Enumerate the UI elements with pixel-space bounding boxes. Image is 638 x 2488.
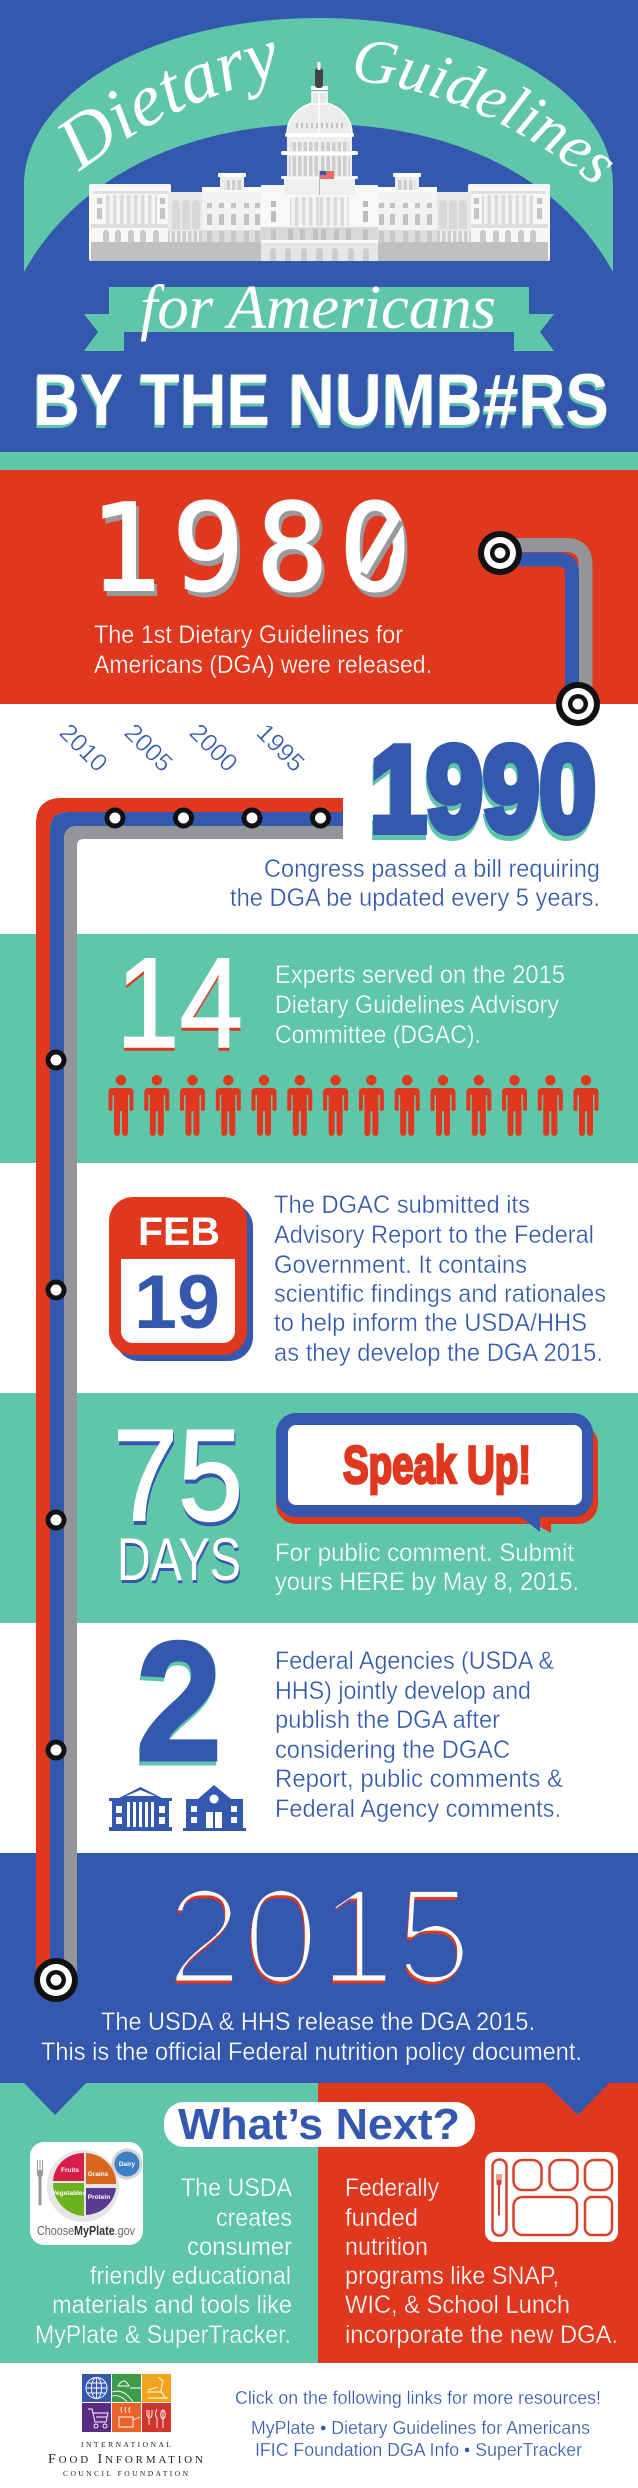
- text: Feb 19 description: The DGAC submitted its: [274, 1191, 530, 1219]
- panel: what's next right: [318, 2083, 638, 2363]
- text: federal agencies description: [275, 1647, 563, 1823]
- year: 1990: 1990: [370, 721, 596, 857]
- title script: Dietary Guidelines: Guidelines: [356, 42, 613, 182]
- text: USDA creates materials: The USDA: [181, 2174, 292, 2202]
- icon: MyPlate card: Fruits: [61, 2167, 79, 2174]
- text: federal agencies description: HHS) jointly develop and: [275, 1677, 531, 1705]
- panel: Feb 19: [0, 1163, 638, 1393]
- stations on timeline: [48, 810, 328, 1758]
- text: 2015 description: The USDA & HHS release the DGA 2015.: [101, 2008, 535, 2036]
- text: 14 experts description: [275, 961, 565, 1049]
- year: 1980: 1980: [89, 480, 411, 619]
- icon: MyPlate card: Dairy: [119, 2161, 136, 2168]
- text: 14 experts description: Experts served on the 2015: [275, 961, 565, 989]
- text: Feb 19 description: Government. It contains: [274, 1251, 527, 1279]
- text: federally funded programs: Federally: [345, 2174, 439, 2202]
- decorative teal strip: [0, 452, 638, 470]
- number: 2: 2: [135, 1611, 221, 1801]
- text: federal agencies description: publish the DGA after: [275, 1706, 500, 1734]
- banner arc: [24, 18, 613, 272]
- text: federal agencies description: Report, public comments &: [275, 1765, 563, 1793]
- text: Feb 19 description: [274, 1191, 606, 1367]
- icon: MyPlate card: Vegetables: [52, 2190, 86, 2197]
- text: 1980 description: Americans (DGA) were released.: [94, 651, 432, 679]
- text: 1990 description: Congress passed a bill requiring: [264, 855, 600, 883]
- station: 2015 end: [34, 1958, 78, 2002]
- icon: calendar Feb 19: FEB: [138, 1210, 220, 1254]
- icon: MyPlate card: [30, 2142, 143, 2245]
- text: 1980 description: [94, 621, 432, 679]
- heading: what's next: What’s Next?: [178, 2100, 460, 2149]
- icon: MyPlate card: ChooseMyPlate.gov: [37, 2223, 135, 2238]
- illustration: US Capitol: [89, 62, 550, 261]
- icons: 14 people: [108, 1075, 598, 1136]
- icon: school lunch tray: [485, 2152, 618, 2242]
- text: Feb 19 description: scientific findings and rationales: [274, 1280, 606, 1308]
- text: Feb 19 description: Advisory Report to the Federal: [274, 1221, 594, 1249]
- labels: update years: 2010: [54, 718, 113, 778]
- number: 14: 14: [116, 932, 243, 1075]
- logo: IFIC foundation name: COUNCIL FOUNDATION: [63, 2469, 189, 2478]
- text: 1980 description: The 1st Dietary Guidelines for: [94, 621, 403, 649]
- station: 1990 transfer: [556, 682, 600, 726]
- number: 14: 14: [116, 935, 243, 1078]
- callout: speak up bubble: [276, 1413, 598, 1533]
- icon: MyPlate card: Grains: [88, 2171, 109, 2178]
- title script: for Americans: for Americans: [140, 274, 496, 342]
- text: 14 experts description: Dietary Guidelines Advisory: [275, 991, 559, 1019]
- text: USDA creates materials: friendly educational: [90, 2262, 291, 2290]
- text: Feb 19 description: as they develop the DGA 2015.: [274, 1339, 603, 1367]
- panel: what's next left: [0, 2083, 318, 2363]
- year: 1980: 1980: [92, 485, 414, 624]
- title script: Dietary Guidelines: Dietary: [58, 42, 274, 172]
- text: USDA creates materials: [35, 2174, 292, 2349]
- number: 2: 2: [136, 1607, 222, 1797]
- text: public comment: [275, 1539, 579, 1596]
- labels: update years: [54, 718, 310, 778]
- labels: update years: 1995: [251, 718, 310, 778]
- text: USDA creates materials: MyPlate & SuperTracker.: [35, 2321, 291, 2349]
- text: 1990 description: the DGA be updated every 5 years.: [230, 884, 600, 912]
- icon: federal building columns: [109, 1787, 172, 1831]
- icon: federal building school: [183, 1785, 246, 1831]
- ribbon: for Americans: [84, 287, 554, 351]
- text: 1990 description: [230, 855, 600, 912]
- text: federally funded programs: programs like SNAP,: [345, 2262, 559, 2290]
- text: federal agencies description: Federal Agencies (USDA &: [275, 1647, 554, 1675]
- text: USDA creates materials: materials and tools like: [52, 2291, 292, 2319]
- logo: IFIC foundation name: F OOD I NFORMATION: [48, 2452, 203, 2467]
- labels: update years: 2005: [119, 718, 178, 778]
- number: 75: 75: [114, 1406, 244, 1552]
- panel: 1990: [0, 704, 638, 934]
- logo: IFIC foundation name: [48, 2440, 203, 2478]
- text: federally funded programs: [345, 2174, 618, 2349]
- text: federally funded programs: incorporate the new DGA.: [345, 2321, 618, 2349]
- icon: MyPlate card: Protein: [88, 2194, 110, 2201]
- text: USDA creates materials: consumer: [187, 2233, 292, 2261]
- text: public comment: yours HERE by May 8, 2015.: [275, 1568, 579, 1596]
- text: 14 experts description: Committee (DGAC).: [275, 1021, 481, 1049]
- text: 2015 description: This is the official Federal nutrition policy document.: [41, 2038, 582, 2066]
- arrow: left pointer: [24, 2083, 86, 2115]
- panel: 14 experts: [0, 934, 638, 1163]
- panel: 1980: [0, 470, 638, 704]
- text: federally funded programs: nutrition: [345, 2233, 428, 2261]
- panel: 2015: [0, 1853, 638, 2083]
- year: 2015: 2015: [165, 1863, 471, 2015]
- text: federally funded programs: funded: [345, 2204, 418, 2232]
- text: resource links: MyPlate • Dietary Guidelines for Americans: [251, 2417, 590, 2438]
- labels: update years: 2000: [184, 718, 243, 778]
- logo: IFIC foundation tiles: [82, 2374, 171, 2432]
- text: Feb 19 description: to help inform the USDA/HHS: [274, 1309, 587, 1337]
- label: days: DAYS: [118, 1529, 242, 1596]
- label: days: DAYS: [117, 1526, 241, 1593]
- panel: 75 days: [0, 1393, 638, 1623]
- text: resource links: IFIC Foundation DGA Info • SuperTracker: [255, 2439, 582, 2460]
- arrow: right pointer: [545, 2083, 609, 2115]
- panel: 2 federal agencies: [0, 1623, 638, 1853]
- logo: IFIC foundation name: INTERNATIONAL: [81, 2440, 171, 2449]
- text: public comment: For public comment. Submit: [275, 1539, 574, 1567]
- year: 2015: 2015: [166, 1860, 472, 2012]
- subway line: main timeline: [36, 798, 343, 1975]
- callout: speak up bubble: Speak Up!: [343, 1436, 531, 1495]
- subway line: top right: [500, 545, 586, 704]
- icon: calendar Feb 19: 19: [134, 1260, 220, 1345]
- text: resource links: Click on the following links for more resources!: [235, 2387, 601, 2408]
- text: federally funded programs: WIC, & School Lunch: [345, 2291, 570, 2319]
- icon: calendar Feb 19: [109, 1197, 253, 1361]
- station: 1980 start: [478, 531, 522, 575]
- panel: header background: [0, 0, 638, 452]
- text: USDA creates materials: creates: [216, 2204, 292, 2232]
- title script: Dietary Guidelines: [58, 42, 613, 182]
- number: 75: 75: [113, 1402, 243, 1548]
- year: 1990: 1990: [369, 726, 595, 862]
- text: federal agencies description: Federal Agency comments.: [275, 1795, 561, 1823]
- text: 2015 description: [41, 2008, 582, 2066]
- text: resource links: [235, 2387, 601, 2460]
- text: federal agencies description: considering the DGAC: [275, 1736, 510, 1764]
